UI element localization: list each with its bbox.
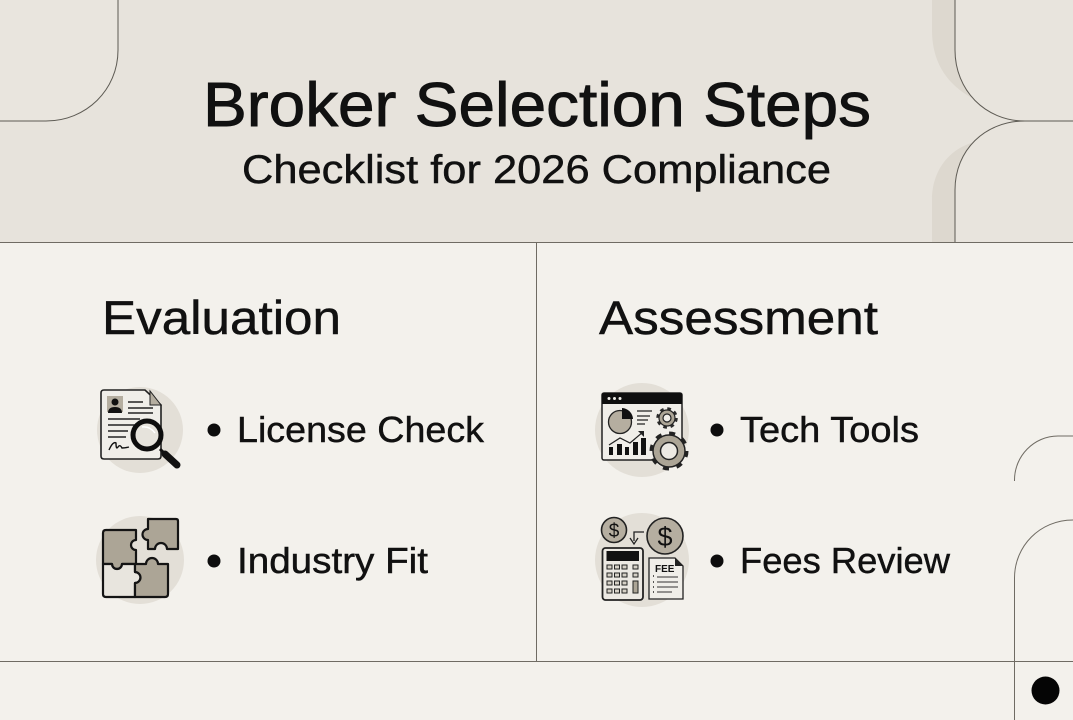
label: Tech Tools: Tech Tools — [740, 409, 919, 450]
icon: license document with magnifier — [97, 387, 183, 473]
title: Broker Selection Steps — [203, 71, 871, 140]
heading: Evaluation: Evaluation — [102, 291, 341, 344]
label: License Check: License Check — [237, 409, 485, 450]
icon: calculator, coins and fee sheet: $ — [609, 521, 620, 542]
subtitle: Checklist for 2026 Compliance — [242, 148, 831, 192]
label: Fees Review: Fees Review — [740, 540, 951, 581]
bullet — [208, 554, 220, 568]
panel: Evaluation — [96, 291, 485, 604]
icon: calculator, coins and fee sheet: $ — [657, 522, 673, 552]
bullet — [710, 554, 724, 568]
panel: header — [0, 0, 1073, 242]
icon: dashboard with gears — [595, 383, 689, 477]
icon: black dot — [1032, 676, 1060, 704]
icon: calculator, coins and fee sheet: FEE — [655, 564, 675, 575]
heading: Assessment: Assessment — [599, 291, 878, 344]
icon: puzzle pieces — [96, 516, 184, 604]
panel: Assessment — [595, 291, 951, 607]
bullet — [208, 424, 220, 436]
bullet — [710, 424, 724, 436]
label: Industry Fit: Industry Fit — [237, 540, 428, 581]
icon: calculator, coins and fee sheet — [595, 513, 689, 607]
